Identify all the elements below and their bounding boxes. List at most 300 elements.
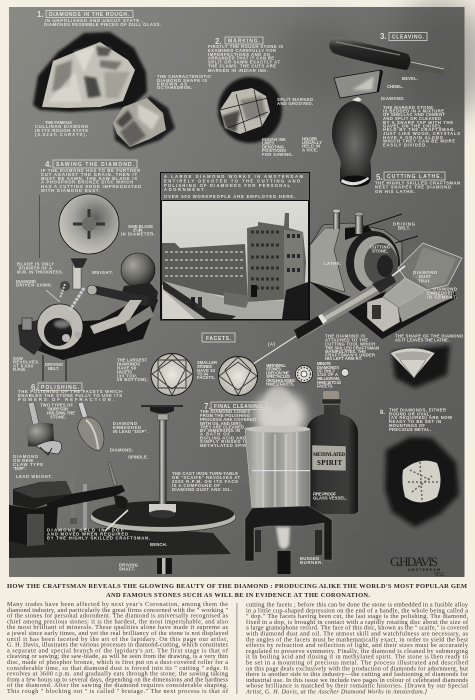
text: article column left: the most brilliant of minerals. These qualities alone have made it supreme as xyxy=(7,624,229,631)
text: cleaving explanation: HELD BY THE CRAFTSMAN. xyxy=(383,127,455,132)
label: smaller stones xyxy=(197,360,217,380)
labels: scaife: IS A COMPOUND OF xyxy=(172,483,220,488)
label: indian ink lines: POSITIONS xyxy=(262,148,286,153)
section 8: finished diamond xyxy=(380,408,459,578)
text: article column right: effects by refraction and reflection of light, and their sizes must be accurately xyxy=(246,642,469,649)
labels: cleaving tools: DIAMOND. xyxy=(381,96,405,101)
label: Cullinan diamond: (3,024¾ CARATS). xyxy=(35,132,87,137)
label: two types of dops: STONE. xyxy=(50,414,66,420)
icon: marked diamond xyxy=(218,77,282,143)
label: split marked: SPLIT MARKED xyxy=(277,97,313,102)
icon: octahedron rough diamond xyxy=(113,96,175,150)
text: polishing explanation xyxy=(18,389,122,402)
icon: small diamond on holder xyxy=(352,97,362,102)
signature: G H Davis: '952 xyxy=(434,572,444,578)
label: saw revolves: R.P.M. xyxy=(13,367,26,372)
labels: held in dop xyxy=(47,528,167,572)
text: finished diamonds note: READY TO BE SET IN xyxy=(389,419,441,424)
text: finished diamonds note: 8. xyxy=(380,410,385,416)
text: cleaving explanation: HAVE A GRAIN ALONG xyxy=(383,135,443,140)
text: unpolished intro: DIAMONDS RESEMBLE PIECES OF DULL GLASS. xyxy=(44,22,161,27)
text: marking explanation: FIRSTLY THE ROUGH STONE IS xyxy=(208,44,283,49)
icon: brilliant side view xyxy=(390,345,450,388)
label: saw blade size: 2¼ IN. xyxy=(133,228,143,232)
text: lathe explanation: NEXT SHAPES THE DIAMOND xyxy=(375,184,451,190)
labels: scaife xyxy=(172,471,240,492)
label: minute diamonds: FACETS. xyxy=(317,384,333,388)
labels: vessel and burner: BUNSEN xyxy=(300,556,319,561)
heading: polishing xyxy=(31,383,82,392)
text: final cleaning explanation: PROCESS ARE COVERED xyxy=(200,417,256,422)
section 5: cutting lathe xyxy=(253,172,463,388)
labels: dop labels: CLAW TYPE xyxy=(13,462,43,467)
text: article column right: the angles of the facets must be mathematically exact, in order to yield the best xyxy=(246,636,468,643)
text: diamond works caption: OVER 500 WORKPEOPLE ARE EMPLOYED HERE. xyxy=(164,194,295,199)
labels: lathe parts: EMBEDDED xyxy=(427,290,454,296)
heading: sawing xyxy=(45,160,137,169)
label: characteristic shape: OCTAHEDRON. xyxy=(157,85,192,90)
label: Cullinan diamond: CULLINAN DIAMOND xyxy=(35,124,88,129)
section 2: marking xyxy=(208,37,313,157)
label: saw revolves xyxy=(13,356,38,372)
label: largest diamonds: (33 TOP, xyxy=(117,374,137,378)
dust tray xyxy=(355,243,462,339)
text: polishing explanation: THE POLISHING OF THE FACETS WHICH xyxy=(18,389,122,394)
polishing arm and weight xyxy=(9,462,128,546)
text: diamond works caption: ADORNMENT. xyxy=(164,187,206,192)
lathe base xyxy=(310,276,456,339)
label: driving belt: BELT. xyxy=(48,366,59,371)
labels: cleaving tools: HOLDER xyxy=(302,136,317,142)
label: saw blade size: SAW BLADE xyxy=(128,224,153,229)
text: article column left: This rough " blocking out " is called " brutage." The next process is that of xyxy=(7,688,229,695)
heading: diamonds in the rough: 1. xyxy=(37,10,44,19)
icon: saw blade disc xyxy=(59,194,119,254)
text: marking explanation: MARKED IN INDIAN INK. xyxy=(208,68,268,73)
label: minute diamonds: DIAMONDS xyxy=(317,365,339,370)
heading: marking xyxy=(215,37,263,46)
icon: methylated spirit bottle xyxy=(306,391,358,514)
label: characteristic shape xyxy=(157,74,211,90)
labels: lathe parts xyxy=(324,222,457,300)
text: article column left: revolves at 3600 r.p.m. and gradually eats through the stone, the sawing taking xyxy=(7,671,228,678)
label: diamond driven saw: DRIVEN SAWN. xyxy=(16,282,52,288)
section 6: polishing xyxy=(9,383,240,574)
text: article column right: whose brilliance is matched by their romantic histories. [Drawn by our Special xyxy=(246,683,468,690)
labels: lathe parts: DIAMOND xyxy=(433,286,457,292)
heading: sawing: SAWING THE DIAMOND. xyxy=(56,162,135,168)
text: article column left: disc, made of phosphor bronze, which is first put on a dust-covered roller for a xyxy=(7,659,228,666)
text: cleaving explanation: BY A SHARP TAP WITH THE xyxy=(383,120,453,125)
column divider xyxy=(236,603,238,694)
label: two types of dops: HOLDING THE xyxy=(47,410,75,416)
icon: lathe machine xyxy=(253,209,462,364)
icon: polishing bench and turntable xyxy=(9,406,236,574)
labels: cleaving tools: CHISEL. xyxy=(387,84,403,89)
text: article column left: until it has been faceted by the art of the lapidary. On this page our artist, xyxy=(7,636,228,643)
labels: scaife: OR "SCAIFE" REVOLVES AT xyxy=(172,475,240,480)
heading: cutting lathe: 5. xyxy=(376,173,383,182)
label: characteristic shape: KNOWN AS xyxy=(157,82,187,86)
label: minute diamonds: MINUTE xyxy=(317,361,331,366)
icon: chisel xyxy=(334,70,383,98)
section 1: diamonds in the rough xyxy=(33,10,211,150)
heading: cutting lathe xyxy=(376,172,445,182)
text: sawing explanation: WITH DIAMOND DUST. xyxy=(41,188,100,193)
text: cutting tool note: THE SKILLED CRAFTSMAN xyxy=(325,346,379,350)
label: saw blade size: IN DIAMETER. xyxy=(121,232,155,236)
text: article column right: in a little cup-shaped depression on the end of a handle, the whole being called a xyxy=(246,607,468,614)
text: cutting tool note: ATTACHED TO THE xyxy=(325,338,368,342)
text: diamond works caption: ENTIRELY DEVOTED TO THE CUTTING AND xyxy=(164,178,300,184)
label: minute diamonds: OF ONLY xyxy=(317,368,335,374)
label: Cullinan diamond: IN ITS ROUGH STATE xyxy=(35,128,88,133)
label: smaller stones: STONES xyxy=(197,364,212,369)
label: minute diamonds: MILLIGRAM, xyxy=(317,376,340,381)
text: unpolished intro xyxy=(44,18,161,27)
label: saw revolves: SAW xyxy=(13,356,23,361)
text: final cleaning explanation: WITH OIL AND DIRT. xyxy=(200,421,242,426)
heading: final cleaning xyxy=(204,402,267,411)
labels: scaife: THE CAST IRON TURN-TABLE xyxy=(172,471,238,476)
label: blade thickness: M.M. IN THICKNESS. xyxy=(17,270,63,274)
label: largest diamonds: DIAMONDS xyxy=(117,362,140,366)
label: smaller stones: FACETS. xyxy=(197,375,215,380)
text: article column left: from a few hours up to several days, depending on the dimensions and the hardness xyxy=(7,676,229,683)
labels: dop labels: "DOP". xyxy=(13,466,26,471)
label: very small stones: STONES xyxy=(266,366,281,372)
icon: minute stone xyxy=(341,369,349,376)
label: A: (A) xyxy=(268,342,276,346)
panel: diamond works photograph xyxy=(160,172,310,320)
labels: lathe parts: DRIVING xyxy=(393,222,415,226)
label: driving belt: DRIVING xyxy=(45,362,63,367)
label: very small stones: HAVE 17 FACETS. xyxy=(266,382,294,386)
heading: cleaving: 3. xyxy=(380,32,387,41)
label: split marked: AND GROOVED. xyxy=(277,101,313,106)
text: diamond works caption: A LARGE DIAMOND WORKS IN AMSTERDAM xyxy=(164,174,304,179)
label: Cullinan diamond: THE FAMOUS xyxy=(45,120,72,125)
label: indian ink lines: DENOTING xyxy=(262,144,284,150)
icon: very small stone xyxy=(296,366,312,382)
text: polishing explanation: ENABLES THE STONE FULLY TO USE ITS xyxy=(18,393,122,398)
caption heading: AND FAMOUS STONES SUCH AS WILL BE IN EVIDENCE AT THE CORONATION. xyxy=(106,592,370,599)
labels: lathe parts: BELT. xyxy=(398,226,410,230)
spindle xyxy=(141,406,183,504)
labels: scaife: 2000 R.P.M. ON ITS FACE xyxy=(172,479,238,484)
text: cutting tool note: THE DIAMOND IS xyxy=(325,334,365,338)
label: largest diamonds: 25 BOTTOM). xyxy=(117,377,148,382)
machine frame xyxy=(18,258,158,355)
text: marking explanation: EXAMINED CAREFULLY FOR xyxy=(208,48,276,53)
label: blade thickness: 8/1000TH OF A xyxy=(19,266,52,270)
labels: dop labels: SPINDLE. xyxy=(128,454,148,460)
text: cleaving explanation: AND SPLIT OR CLEAVED xyxy=(383,116,441,121)
text: final cleaning explanation: BY IMMERSING IN xyxy=(200,428,240,433)
text: cleaving explanation: GAVEL ON THE CHISEL xyxy=(383,124,441,128)
text: article column right: Artist, G. H. Davis, at the Asscher Diamond Works in Amsterdam.] xyxy=(245,688,428,696)
text: lathe explanation xyxy=(375,180,460,194)
labels: lathe parts: DUST xyxy=(419,274,431,279)
cutting tool handle xyxy=(253,266,405,364)
labels: held in dop: DIAMOND HELD IN "DOP" xyxy=(47,528,127,532)
text: article column right: on this page deals exclusively with the production of diamonds for adornment, but xyxy=(246,665,468,672)
label: smaller stones: TO 34 xyxy=(197,372,209,376)
text: cleaving explanation: OF SHELLAC AND CEMENT xyxy=(383,112,445,117)
icon: finished brilliant on black xyxy=(385,437,459,527)
labels: held in dop: BY THE HIGHLY SKILLED CRAFTSMAN. xyxy=(47,536,150,540)
icon: steam xyxy=(254,386,306,439)
text: finished diamonds note: THE DIAMONDS, EITHER xyxy=(389,408,446,412)
label: blade thickness xyxy=(17,262,63,274)
label: saw blade size xyxy=(121,224,155,236)
text: sawing explanation: A PHOSPHOR BRONZE DISC WHICH xyxy=(41,180,133,184)
text: diamond works caption: POLISHING OF DIAMONDS FOR PERSONAL xyxy=(164,183,290,188)
text: cutting tool note xyxy=(325,334,379,361)
labels: lathe parts: LATHE. xyxy=(324,261,341,266)
caption heading xyxy=(7,583,467,599)
labels: vessel and burner: GLASS VESSEL. xyxy=(313,496,347,500)
label: very small stones xyxy=(266,363,295,386)
icon: smaller brilliant xyxy=(218,356,258,396)
text: article column left: cleaving or sawing; the saw-blade, as will be seen from the drawing, is a very thin xyxy=(7,653,228,660)
text: lathe explanation: THE HIGHLY SKILLED CRAFTSMAN xyxy=(375,180,460,186)
text: article column left: Many trades have been affected by next year's Coronation, among them the xyxy=(7,601,228,608)
label: characteristic shape: THE CHARACTERISTIC xyxy=(157,74,211,79)
text: article column left: of the diamond. After the sawing the diamond requires considerable shaping. xyxy=(7,682,228,689)
labels: dop labels: DIAMOND xyxy=(13,454,38,459)
heading: marking: 2. xyxy=(215,37,222,46)
text: marking explanation xyxy=(208,44,283,73)
label: largest diamonds: FACETS xyxy=(117,370,132,374)
text: article column right: it in boiling acid and rinsing it in methylated spirit. The stone is then ready to xyxy=(246,654,468,661)
text: article column right: be set in a mounting of precious metal. The process illustrated and described xyxy=(246,660,469,666)
text: article column left xyxy=(7,601,229,695)
heading: polishing: 6. xyxy=(31,383,38,392)
text: marking explanation: SPLIT OR SAWN EXACTLY AT xyxy=(208,60,280,64)
heading: cleaving: CLEAVING. xyxy=(392,34,425,40)
labels: lathe parts: DIAMOND xyxy=(413,270,437,275)
heading: marking: MARKING. xyxy=(228,38,261,44)
bottle label: METHYLATED xyxy=(313,453,345,458)
label: saw revolves: AT 5,000 xyxy=(13,364,34,368)
text: cleaving explanation xyxy=(383,105,460,148)
label: Cullinan diamond xyxy=(35,120,88,137)
text: polishing explanation: POWERS OF REFRACTION. xyxy=(18,397,114,402)
text: finished diamonds note xyxy=(380,408,452,432)
labels: held in dop: SHAFT. xyxy=(119,566,135,572)
label: split marked xyxy=(277,97,313,106)
text: article column right: cutting the facets ; before this can be done the stone is embedded in a fusible alloy xyxy=(246,602,469,608)
icon: tripod stand xyxy=(245,506,332,561)
labels: held in dop: AND MOVED WHEN REQUIRED xyxy=(47,532,128,536)
bottle label: SPIRIT xyxy=(317,459,342,467)
label: minute diamonds: 1/10 OF A xyxy=(317,372,338,377)
text: cleaving explanation: EASILY DIVIDED. xyxy=(383,142,427,148)
text: finished diamonds note: PRECIOUS METAL. xyxy=(389,427,431,432)
text: final cleaning explanation: THE DIAMOND COMES xyxy=(200,409,250,414)
labels: dop labels: DIAMOND xyxy=(113,421,137,426)
turntable scaife xyxy=(90,501,236,532)
text: finished diamonds note: MOUNTINGS OF xyxy=(389,423,425,428)
label: very small stones: VERY SMALL xyxy=(266,363,286,368)
text: cutting tool note: MANIPULATES. THE xyxy=(325,349,366,354)
text: cutting tool note: CRAFTSMAN'S UNDER xyxy=(325,352,375,358)
signature: G H Davis: G.HDAVIS xyxy=(390,554,438,569)
text: sawing explanation: HAS A CUTTING EDGE IMPREGNATED xyxy=(41,184,141,189)
heading: facets: FACETS. xyxy=(206,336,232,342)
label: two types of dops xyxy=(40,402,75,420)
icon: claw type dop xyxy=(27,402,62,455)
heading: polishing: POLISHING. xyxy=(41,385,80,391)
label: minute diamonds xyxy=(317,361,342,388)
label: indian ink lines: FOR SAWING. xyxy=(262,152,293,157)
text: article column left: a separate and special branch of the lapidary's art. The first stage is that of xyxy=(7,647,229,654)
icon: large brilliant 58 facets xyxy=(151,354,193,396)
labels: scaife: DIAMOND DUST AND OIL. xyxy=(172,487,232,492)
text: diamond works caption xyxy=(161,173,309,200)
text: final cleaning explanation xyxy=(200,409,256,448)
label: driving belt xyxy=(45,362,63,371)
icon: gavel xyxy=(329,37,445,75)
labels: dop labels: EMBEDDED xyxy=(113,425,141,430)
section: facets xyxy=(117,333,349,396)
label: very small stones: SPECTACLES xyxy=(266,374,290,379)
label: shape leaving lathe xyxy=(395,334,463,342)
text: unpolished intro: IN UNPOLISHED AND UNCUT STATE , xyxy=(45,18,143,23)
lathe body xyxy=(310,223,402,297)
text: final cleaning explanation: METHYLATED SPIRIT. xyxy=(200,443,252,448)
label: diamond driven saw: DIAMOND xyxy=(16,279,36,284)
text: cleaving explanation: WHICH THEY CAN BE MORE xyxy=(383,138,455,144)
section 7: final cleaning xyxy=(200,386,358,574)
labels: held in dop: BENCH. xyxy=(150,542,167,547)
labels: held in dop: DRIVING xyxy=(119,562,138,568)
heading: sawing: 4. xyxy=(45,160,52,169)
text: article column right: a large gramophone record. The face of this disc, known as the " scaife," is covered xyxy=(246,625,469,632)
label: indian ink lines: LINES xyxy=(262,140,274,146)
text: marking explanation: ARRANGED THAT IT CAN BE xyxy=(208,56,274,60)
text: sawing explanation: MUST BE SAWN. THE SAW BLADE IS xyxy=(41,176,137,181)
label: very small stones: OR SUN-GLASSES xyxy=(266,378,295,383)
text: marking explanation: IMPERFECTIONS AND SO xyxy=(208,52,271,57)
labels: cleaving tools: HELD IN xyxy=(302,144,320,148)
text: cutting tool note: HIS LEFT ARM RT. xyxy=(325,356,362,361)
section 3: cleaving xyxy=(302,32,460,187)
text: cleaving explanation: JUST LIKE WOOD, CRYSTALS xyxy=(383,131,460,136)
label: largest diamonds: THE LARGEST xyxy=(117,358,147,362)
text: article column right: industrial use. In this issue we include two pages in colour of celebrated diamonds xyxy=(246,677,469,684)
section 4: sawing the diamond xyxy=(13,160,158,381)
labels: cleaving tools xyxy=(302,76,418,152)
label: largest diamonds: HAVE 58 xyxy=(117,366,137,370)
label: shape leaving lathe: THE SHAPE OF THE DIAMOND xyxy=(395,334,463,338)
text: final cleaning explanation: FROM THE POLISHING xyxy=(200,413,250,418)
text: lathe explanation: ON HIS LATHE. xyxy=(375,189,415,194)
labels: cleaving tools: BEVEL. xyxy=(402,76,418,81)
text: article column left: considerable time, so that diamond dust is forced into its " cutting " edge. It xyxy=(7,665,228,672)
label: indian ink lines: INDIAN INK xyxy=(262,137,286,142)
text: article column right: with diamond dust and oil. The utmost skill and watchfulness are necessary, as xyxy=(246,630,469,638)
text: article column left: chief among precious stones: it is the hardest, the most imperishable, and also xyxy=(7,618,228,625)
label: smaller stones: SMALLER xyxy=(197,360,217,365)
text: finished diamonds note: (AS REQUIRED) ARE NOW xyxy=(389,415,452,420)
label: smaller stones: HAVE 10 xyxy=(197,368,216,373)
text: final cleaning explanation: SIMPLY RINSED IN xyxy=(200,439,248,444)
text: article column left: of the stones for personal adornment. The diamond is universally recognised as xyxy=(7,613,229,620)
text: article column right: " dop." The facets having been cut, the last stage is the polishing. The diamond, xyxy=(246,613,468,620)
labels: dop labels: LEAD WEIGHT. xyxy=(16,474,52,479)
label: weight: WEIGHT. xyxy=(92,270,113,275)
labels: lathe parts: IN CEMENT. xyxy=(427,294,457,300)
label: indian ink lines xyxy=(262,137,293,157)
icon: driving belt lines xyxy=(43,355,66,381)
leader line: blade to machine xyxy=(38,195,40,258)
text: article column left: G. H. Davis, illustrates the various processes in diamond-cutting, which constitutes xyxy=(7,642,229,649)
label: largest diamonds xyxy=(117,358,148,382)
text: cutting tool note: CUTTING TOOL WHICH xyxy=(325,342,375,346)
bench xyxy=(9,527,231,558)
label: diamond driven saw xyxy=(16,279,52,288)
labels: lathe parts: TRAY. xyxy=(418,278,431,284)
label: characteristic shape: DIAMOND SHAPE IS xyxy=(157,78,207,83)
text: finished diamonds note: ROUND OR OVAL, xyxy=(389,412,431,416)
text: final cleaning explanation: THEY ARE CLEANED xyxy=(200,424,244,430)
signature: G H Davis: AMSTERDAM xyxy=(408,568,440,572)
label: saw revolves: REVOLVES xyxy=(13,360,38,364)
label: minute diamonds: HAVE 10 TO 14 xyxy=(317,380,342,385)
labels: dop labels: IN LEAD "DOP". xyxy=(113,429,148,434)
text: article column right: fixed in a dop, is brought in contact with a rapidly rotating disc about the size of xyxy=(246,619,469,626)
heading: diamonds in the rough: DIAMONDS IN THE ROUGH. xyxy=(49,12,130,18)
text: marking explanation: THE FLAWS. THE CUTS ARE xyxy=(208,64,276,68)
text: article column left: diamond industry, and particularly the great firms concerned with the " working " xyxy=(7,607,228,614)
machine base xyxy=(23,292,158,360)
heading: diamonds in the rough xyxy=(37,10,133,19)
labels: lathe parts: STONE. xyxy=(372,248,388,254)
icon: sawing machine xyxy=(18,253,158,360)
labels: vessel and burner xyxy=(300,492,347,565)
icon: Cullinan rough diamond xyxy=(33,32,147,112)
label: two types of dops: TWO TYPES OF xyxy=(40,402,73,408)
heading: cutting lathe: CUTTING LATHE. xyxy=(387,174,443,180)
heading: final cleaning: FINAL CLEANING. xyxy=(214,404,265,410)
text: final cleaning explanation: A BATH OF xyxy=(200,432,230,436)
heading: cleaving xyxy=(380,32,427,41)
icon: lead dop xyxy=(78,402,104,451)
text: cleaving explanation: THE MARKED STONE xyxy=(383,105,433,110)
bottle label xyxy=(312,445,346,471)
text: sawing explanation: CUT AGAINST THE GRAIN, THEN IT xyxy=(41,172,137,177)
icon: glass beaker xyxy=(245,426,310,514)
icon: bunsen burner xyxy=(276,527,290,574)
text: sawing explanation: IF THE DIAMOND HAS TO BE FURTHER xyxy=(41,168,140,173)
text: article column right: regulated to preserve symmetry. Finally, the diamond is cleaned by submerging xyxy=(246,648,468,655)
labels: dop labels: DIAMOND. xyxy=(110,448,133,452)
driving shaft xyxy=(157,558,172,574)
icon: holder xyxy=(332,101,377,187)
text: article column right xyxy=(245,602,469,696)
text: article column right: there is another side to this industry—the cutting and fashioning of diamonds for xyxy=(246,671,468,678)
label: shape leaving lathe: AS IT LEAVES THE LATHE. xyxy=(395,338,449,342)
text: article column left: a jewel since early times, and yet the real brilliancy of the stone is not displayed xyxy=(7,630,229,637)
text: cleaving explanation: IS BEDDED IN A MIXTURE xyxy=(383,108,444,114)
labels: dop labels: ON NEW xyxy=(13,458,33,463)
photograph: factory building xyxy=(162,201,308,319)
caption heading: HOW THE CRAFTSMAN REVEALS THE GLOWING BEAUTY OF THE DIAMOND : PRODUCING ALIKE THE WORLD'S MOST POPULAR GEM xyxy=(7,583,467,590)
label: blade thickness: BLADE IS ONLY xyxy=(17,262,54,266)
label: two types of dops: "DOPS" FOR xyxy=(47,406,68,412)
